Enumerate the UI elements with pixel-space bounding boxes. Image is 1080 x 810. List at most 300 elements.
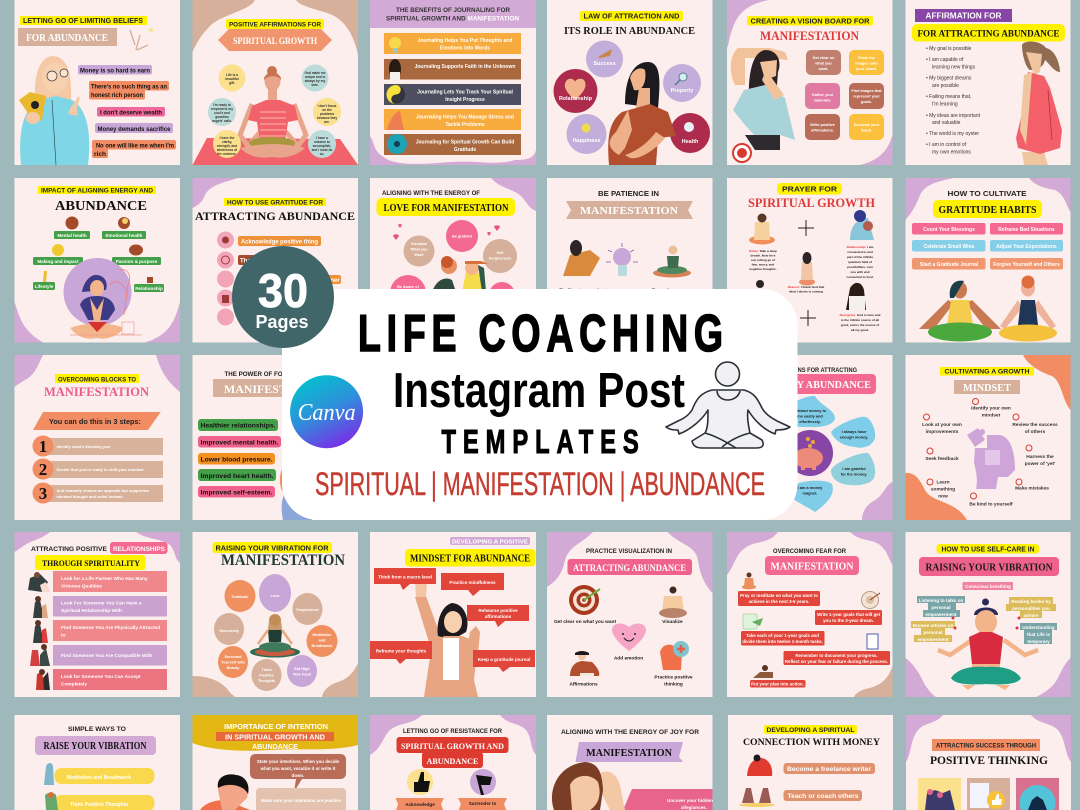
step rows: 1 bbox=[39, 437, 47, 456]
vision board steps: goals. bbox=[861, 100, 872, 104]
heading: affirmations for attracting: MONEY ABUNDANCE bbox=[765, 380, 871, 391]
ribbon: acknowledge: Acknowledge bbox=[405, 802, 435, 807]
visualization labels bbox=[554, 619, 693, 688]
icon: woman holding cards bbox=[19, 28, 153, 165]
heading: mindset for abundance: DEVELOPING A POSITIVE bbox=[452, 540, 528, 546]
mindset labels: something bbox=[931, 486, 955, 492]
benefit pills: Lower blood pressure. bbox=[200, 456, 273, 464]
affirmation bubbles: respond to my bbox=[211, 107, 233, 111]
heading: self-care bbox=[919, 544, 1059, 576]
banner: 3 steps: You can do this in 3 steps: bbox=[49, 417, 141, 426]
blue affirmation blobs: I am a money bbox=[798, 485, 822, 490]
step rows: mindset thought and belief instead bbox=[56, 494, 123, 499]
heading: mindset for abundance: MINDSET FOR ABUNDANCE bbox=[410, 554, 530, 564]
journaling benefit bars: Journaling for Spiritual Growth Can Build bbox=[416, 140, 514, 146]
prayer text blocks: is the infinite source of all bbox=[841, 318, 879, 322]
heading: positive thinking: POSITIVE THINKING bbox=[930, 753, 1048, 767]
vibration blobs: Meditation bbox=[313, 633, 331, 637]
panel: attracting success through positive thinking bbox=[906, 715, 1071, 810]
visualization labels: thinking bbox=[664, 682, 683, 688]
fear steps: you to the 3-year dream. bbox=[823, 618, 874, 623]
intention bubble 1: down. bbox=[292, 773, 304, 778]
visualization labels: Get clear on what you want bbox=[554, 619, 616, 625]
intention bubble 1 bbox=[250, 754, 346, 792]
vision board steps: what you bbox=[814, 62, 832, 66]
heading: joy: MANIFESTATION bbox=[586, 748, 672, 759]
heading: mindset for abundance bbox=[405, 537, 536, 566]
vibration blobs: Beauty bbox=[227, 666, 240, 670]
fear steps: Put your plan into action. bbox=[751, 682, 804, 686]
label: money is so hard to earn: Money is so hard to earn bbox=[80, 68, 150, 74]
gratitude icons and bars bbox=[217, 232, 341, 326]
red speech bubbles bbox=[370, 568, 535, 672]
vision board steps: Get clear on bbox=[813, 56, 834, 60]
caption peeking above cover bbox=[559, 288, 683, 295]
prayer text blocks: what I desire is coming bbox=[788, 290, 823, 294]
heading: intention: ABUNDANCE bbox=[252, 744, 298, 751]
relationship tips: Spiritual Relationship With bbox=[61, 608, 122, 614]
affirmation bubbles bbox=[208, 64, 341, 126]
heading: affirmation for bbox=[915, 9, 1012, 22]
benefit circles bbox=[554, 40, 710, 154]
heading: positive thinking bbox=[930, 739, 1048, 767]
heading: prayer: PRAYER FOR bbox=[782, 184, 838, 194]
self-care labels: personalities you bbox=[1012, 606, 1050, 611]
benefit pills: Improved heart health. bbox=[200, 473, 274, 480]
pill: teach or coach bbox=[784, 790, 862, 801]
vision board steps bbox=[805, 50, 884, 140]
heading: law of attraction: LAW OF ATTRACTION AND bbox=[584, 14, 680, 20]
heading: impact of aligning bbox=[38, 186, 156, 213]
panel: impact of aligning energy bbox=[14, 178, 180, 342]
heading: raise vibration: SIMPLE WAYS TO bbox=[68, 726, 126, 733]
gratitude icons and bars: ner bbox=[330, 278, 340, 284]
love circles: What you bbox=[410, 248, 428, 252]
mindset labels: Harness the bbox=[1026, 455, 1054, 460]
benefit pills: Healthier relationships. bbox=[200, 422, 276, 430]
heading: the power of forgiveness bbox=[213, 371, 333, 397]
blue affirmation blobs: I always have bbox=[842, 429, 866, 434]
heading: limiting beliefs: LETTING GO OF LIMITING BELIEFS bbox=[23, 18, 143, 25]
panel: practice visualization bbox=[547, 532, 712, 697]
label: relationship bbox=[134, 284, 164, 292]
intention bubble 1: what you want, vocalize it or write it bbox=[260, 766, 336, 771]
fear steps: Write 1-year goals that will get bbox=[817, 612, 880, 617]
habit bubbles: Count Your Blessings bbox=[923, 227, 975, 233]
affirmation bubbles: because they bbox=[317, 116, 337, 120]
heading: law of attraction: ITS ROLE IN ABUNDANCE bbox=[564, 25, 695, 37]
vibration blobs: Positive bbox=[259, 674, 274, 678]
gratitude icons and bars: Acknowledge positive thing bbox=[241, 240, 318, 246]
heading: attracting abundance: ATTRACTING ABUNDANCE bbox=[573, 564, 686, 574]
vision board steps: your board. bbox=[856, 67, 877, 71]
journaling benefit bars: Gratitude bbox=[454, 147, 476, 153]
caption peeking above cover: Develop a bbox=[652, 288, 683, 295]
affirmation list: are possible bbox=[932, 83, 959, 89]
heading: positive affirmations bbox=[226, 19, 324, 29]
heading: journaling bbox=[386, 7, 519, 22]
benefit pills bbox=[198, 419, 281, 498]
heading: vision board bbox=[747, 16, 873, 43]
prayer text blocks: out, letting go of bbox=[751, 258, 776, 262]
visualization labels: Practice positive bbox=[654, 676, 693, 680]
heading: the power of forgiveness: MANIFESTATION bbox=[224, 384, 325, 396]
icon: meditating woman in purple circle bbox=[64, 258, 142, 339]
self-care labels: Reading books by bbox=[1011, 599, 1051, 604]
habit bubbles: Adjust Your Expectations bbox=[996, 244, 1057, 250]
heading: affirmations for attracting: AFFIRMATIONS FOR ATTRACTING bbox=[763, 367, 857, 374]
panel: creating a vision board bbox=[727, 0, 892, 165]
benefit circles: Happiness bbox=[573, 138, 600, 144]
journaling benefit bars: Journaling Lets You Track Your Spiritual bbox=[417, 90, 513, 96]
icon: canva logo bbox=[290, 375, 363, 448]
affirmation bubbles: Life is a bbox=[226, 73, 238, 77]
label: money demands sacrifice: Money demands sacrifice bbox=[98, 126, 171, 133]
affirmation list: • Failing means that, bbox=[926, 94, 971, 100]
label: no one will like me bbox=[92, 140, 176, 158]
panel: how to cultivate gratitude habits bbox=[906, 178, 1070, 342]
heading: self-care: HOW TO USE SELF-CARE IN bbox=[942, 546, 1034, 554]
heading: resistance: SPIRITUAL GROWTH AND bbox=[401, 741, 504, 751]
heading: relationships bbox=[31, 542, 168, 570]
icon: writing person bbox=[570, 651, 599, 676]
affirmation list: • My ideas are important bbox=[926, 113, 981, 119]
fear steps: divide them into twelve 1-month tasks. bbox=[742, 639, 823, 644]
vibration blobs: Think bbox=[261, 668, 272, 672]
image tile: glowing silhouette bbox=[1016, 778, 1059, 810]
vibration blobs: Thoughts bbox=[258, 679, 275, 683]
affirmation list: • I am capable of bbox=[926, 57, 964, 63]
vibration blobs: Love bbox=[271, 594, 279, 598]
affirmation list: • I am in control of bbox=[926, 142, 967, 148]
vision board steps: affirmations. bbox=[811, 128, 834, 132]
affirmation bubbles: unique and is bbox=[305, 75, 325, 79]
love circles bbox=[390, 220, 517, 311]
cover panel: white title card bbox=[282, 289, 798, 520]
vision board steps: materials. bbox=[814, 98, 831, 102]
plus signs bbox=[798, 220, 816, 326]
heading: connection with money: DEVELOPING A SPIRITUAL bbox=[766, 727, 855, 734]
heading: positive affirmations: POSITIVE AFFIRMATIONS FOR bbox=[229, 22, 321, 28]
relationship tips: to bbox=[61, 632, 66, 638]
love circles: Visualize bbox=[411, 242, 427, 246]
fear steps: Take each of your 1-year goals and bbox=[746, 633, 819, 638]
journaling benefit bars: Tackle Problems bbox=[445, 122, 485, 128]
label: no such thing as an honest rich person bbox=[89, 81, 169, 100]
icon: meditating woman on mat bbox=[250, 614, 300, 658]
blue affirmation blobs: me easily and bbox=[797, 414, 823, 418]
icon: two meditating women bbox=[919, 276, 1057, 342]
affirmation list: my own emotions bbox=[932, 150, 971, 156]
blue affirmation blobs bbox=[780, 396, 875, 512]
mindset labels: Identify your own bbox=[971, 406, 1011, 412]
heading: vision board: MANIFESTATION bbox=[760, 28, 860, 43]
journaling benefit bars: Journaling Supports Faith in the Unknown bbox=[415, 64, 515, 70]
habit bubbles: Forgive Yourself and Others bbox=[993, 262, 1060, 268]
panel: be patience in manifestation bbox=[547, 178, 712, 342]
heading: affirmation for: AFFIRMATION FOR bbox=[926, 12, 1002, 20]
panel: overcoming fear bbox=[727, 532, 892, 697]
icon: smiling heart bbox=[612, 623, 646, 651]
affirmation list: • The world is my oyster bbox=[926, 131, 979, 137]
relationship tips: Find Someone You Are Physically Attracted bbox=[61, 626, 160, 631]
panel: importance of intention bbox=[192, 715, 358, 810]
panel: aligning with energy of love bbox=[370, 178, 536, 342]
step rows: Identify what's blocking you bbox=[56, 444, 110, 449]
intention bubble 1: State your intentions. When you decide bbox=[257, 759, 339, 764]
prayer text blocks: Reason: I thank God that bbox=[788, 285, 824, 289]
icon: puzzle head bbox=[967, 428, 1015, 489]
panel: prayer for spiritual growth bbox=[727, 178, 892, 342]
prayer text blocks: all my good. bbox=[851, 328, 869, 332]
heading: gratitude: ATTRACTING ABUNDANCE bbox=[195, 209, 355, 223]
heading: resistance: LETTING GO OF RESISTANCE FOR bbox=[403, 728, 502, 735]
mindset labels: Review the success bbox=[1012, 423, 1058, 428]
icon: woman in red jacket bbox=[1016, 42, 1062, 165]
affirmation bubbles: I'm ready to bbox=[213, 103, 231, 107]
heading: growth mindset: MINDSET bbox=[963, 383, 1011, 394]
blue affirmation blobs: I am grateful bbox=[842, 466, 866, 471]
self-care labels: empowerment bbox=[925, 612, 957, 617]
affirmation bubbles: I don't focus bbox=[318, 104, 336, 108]
affirmation list: • My biggest dreams bbox=[926, 76, 972, 82]
fear steps bbox=[738, 591, 890, 688]
heading: intention: IMPORTANCE OF INTENTION bbox=[224, 722, 328, 731]
prayer text blocks: one with and bbox=[851, 270, 870, 274]
affirmation bubbles: side. bbox=[311, 83, 319, 87]
heading: journaling: THE BENEFITS OF JOURNALING FOR bbox=[396, 7, 510, 14]
mindset labels: of others bbox=[1025, 429, 1046, 435]
red speech bubbles: affirmations bbox=[485, 614, 512, 619]
vibration blobs: Eat High bbox=[294, 667, 310, 671]
tagline: SPIRITUAL | MANIFESTATION | ABUNDANCE bbox=[315, 466, 765, 502]
benefit circles: Relationship bbox=[559, 96, 593, 102]
hexagon title: spiritual growth bbox=[218, 29, 332, 51]
step rows: 2 bbox=[39, 460, 47, 479]
prayer figures bbox=[749, 210, 874, 310]
heading: affirmations for attracting bbox=[760, 367, 876, 394]
vibration blobs: Forgiveness bbox=[296, 608, 319, 612]
panel: affirmations for attracting abundance bbox=[727, 355, 892, 520]
icon: woman with raised arm bbox=[731, 48, 795, 162]
heading: gratitude habits: HOW TO CULTIVATE bbox=[948, 189, 1026, 198]
pink text shape: allegiances. bbox=[681, 805, 707, 810]
panel: hidden by cover bbox=[370, 355, 712, 520]
label: no one will like me: No one will like me when I'm bbox=[96, 142, 174, 150]
vibration blobs bbox=[214, 574, 338, 691]
prayer text blocks: Relationship: I am bbox=[847, 245, 873, 249]
label: relationship: Relationship bbox=[135, 286, 163, 291]
mindset labels: improvements bbox=[926, 429, 959, 435]
habit bubbles: Reframe Bad Situations bbox=[998, 227, 1055, 233]
affirmation bubbles lower: I have the bbox=[220, 136, 234, 140]
affirmation bubbles: God made me bbox=[304, 71, 326, 75]
red speech bubbles: Reframe your thoughts bbox=[376, 648, 427, 654]
heading: intention bbox=[216, 722, 334, 751]
heading: raising vibration: RAISING YOUR VIBRATION FOR bbox=[216, 546, 328, 552]
self-care labels: admire bbox=[1023, 613, 1039, 618]
label: I don't deserve wealth bbox=[97, 107, 165, 116]
love circles: Be Aware of bbox=[397, 285, 420, 289]
heading: relationships: ATTRACTING POSITIVE bbox=[31, 546, 107, 553]
self-care labels: that Life is bbox=[1027, 632, 1050, 637]
heading: love for manifestation: LOVE FOR MANIFESTATION bbox=[384, 203, 509, 214]
heading: relationships: RELATIONSHIPS bbox=[113, 546, 166, 553]
love circles: Forgiveness bbox=[489, 256, 511, 260]
heading: prayer bbox=[748, 183, 875, 210]
mindset labels: Look at your own bbox=[922, 423, 962, 428]
prayer text blocks: Recognize: God is here and bbox=[840, 313, 880, 317]
love circles: Be grateful bbox=[452, 234, 472, 238]
mindset labels: Seek feedback bbox=[925, 456, 959, 462]
affirmation list: learning new things bbox=[932, 64, 976, 70]
subheading box: for abundance bbox=[18, 28, 117, 46]
affirmation list: • My goal is possible bbox=[926, 46, 972, 52]
affirmation bubbles: are. bbox=[324, 120, 330, 124]
heading: raise vibration: RAISE YOUR VIBRATION bbox=[44, 741, 147, 752]
journaling benefit bars: Journaling Helps You Put Thoughts and bbox=[418, 38, 512, 44]
caption peeking above cover: Reflect on what bbox=[559, 288, 608, 295]
self-care labels: Understanding bbox=[1022, 625, 1055, 630]
vibration blobs: and bbox=[319, 638, 326, 642]
heading: joy bbox=[561, 729, 699, 762]
impact labels and icons bbox=[33, 216, 161, 290]
ways: yellow pills bbox=[44, 763, 154, 810]
label: no such thing as an honest rich person: There's no such thing as an bbox=[91, 84, 167, 90]
label: I don't deserve wealth: I don't deserve wealth bbox=[100, 110, 162, 116]
ways: yellow pills: Meditation and Breathwork bbox=[67, 775, 131, 781]
prayer text blocks: negative thoughts. bbox=[749, 267, 777, 271]
heading: attracting abundance: PRACTICE VISUALIZATION IN bbox=[586, 548, 672, 555]
vision board steps: Gather your bbox=[812, 93, 833, 97]
affirmation bubbles: angels' calls. bbox=[212, 119, 232, 123]
mindset labels: power of 'yet' bbox=[1025, 461, 1055, 467]
love circles: Self bbox=[497, 251, 503, 255]
self-care labels: personal bbox=[931, 605, 951, 610]
mindset labels bbox=[922, 398, 1058, 508]
subheading box: for abundance: FOR ABUNDANCE bbox=[26, 33, 108, 44]
affirmation bubbles lower: and I must do bbox=[312, 148, 332, 152]
blue affirmation blobs: I attract money to bbox=[794, 408, 826, 413]
relationship tips: Completely bbox=[61, 682, 87, 688]
vision board steps: images onto bbox=[855, 62, 878, 66]
affirmation bubbles lower: mission to bbox=[314, 140, 330, 144]
red speech bubbles: Rehearse positive bbox=[478, 608, 518, 613]
heading: intention: IN SPIRITUAL GROWTH AND bbox=[225, 734, 325, 742]
title: for attracting abundance bbox=[912, 24, 1065, 42]
step rows: Decide that you're ready to shift your mindset bbox=[56, 467, 144, 472]
relationship tips: Virtuous Qualities bbox=[61, 584, 102, 590]
label: money is so hard to earn bbox=[78, 65, 152, 74]
heading: self-care: RAISING YOUR VIBRATION bbox=[926, 562, 1053, 574]
vibration blobs: Generosity bbox=[219, 629, 240, 633]
panel: developing a spiritual connection with money bbox=[728, 715, 893, 810]
icon: thumbs up bbox=[407, 769, 433, 795]
self-care labels: Listening to talks on bbox=[919, 598, 963, 603]
heading: love for manifestation: ALIGNING WITH THE ENERGY OF bbox=[382, 190, 480, 197]
label: money demands sacrifice bbox=[95, 123, 173, 133]
benefit pills: Improved mental health. bbox=[200, 440, 279, 446]
heading: impact of aligning: ABUNDANCE bbox=[55, 198, 147, 213]
fear icons bbox=[742, 572, 880, 678]
step rows bbox=[32, 436, 163, 504]
fear steps: Remember to document your progress. bbox=[795, 653, 878, 658]
panel: aligning with energy of joy bbox=[547, 715, 713, 810]
fear steps: Pray or meditate on what you want to bbox=[740, 593, 818, 598]
panel: developing a positive mindset bbox=[370, 532, 536, 697]
icon: meditating woman with hearts bbox=[938, 598, 1038, 690]
blue affirmation blobs: magnet. bbox=[803, 490, 817, 496]
title: templates: TEMPLATES bbox=[442, 424, 639, 461]
mindset labels: now bbox=[938, 494, 948, 500]
panel: how to use gratitude bbox=[192, 178, 358, 342]
heading: growth mindset: CULTIVATING A GROWTH bbox=[944, 368, 1030, 376]
heading: vision board: CREATING A VISION BOARD FOR bbox=[750, 18, 870, 26]
pill: freelance writer bbox=[784, 763, 875, 774]
affirmation list: and valuable bbox=[932, 120, 961, 126]
panel: overcoming blocks bbox=[14, 355, 180, 520]
vibration blobs: Vibe Food bbox=[293, 672, 312, 676]
self-care labels: Conscious breathing bbox=[965, 584, 1011, 589]
self-care labels bbox=[911, 582, 1057, 644]
heading: resistance bbox=[396, 728, 508, 768]
image tile: thumbs up checklist bbox=[967, 778, 1010, 810]
ribbon: surrender: Surrender to bbox=[469, 801, 496, 806]
pill: freelance writer: Become a freelance writer bbox=[787, 767, 872, 773]
title: life coaching: LIFE COACHING bbox=[358, 304, 723, 362]
panel: raising your vibration bbox=[192, 532, 358, 697]
heading: relationships: THROUGH SPIRITUALITY bbox=[42, 558, 140, 568]
gratitude icons and bars: Thank others bbox=[240, 258, 278, 264]
benefit circles: Success bbox=[593, 61, 616, 67]
journaling benefit bars: Emotions into Words bbox=[440, 46, 490, 52]
blue affirmation blobs: for the money. bbox=[841, 472, 867, 476]
icon: couple bbox=[432, 256, 488, 292]
affirmation bubbles lower: accomplish, bbox=[313, 144, 331, 148]
panel: self-care raising your vibration bbox=[906, 532, 1070, 697]
ribbon: acknowledge bbox=[396, 798, 444, 810]
icon: meditating person bbox=[659, 586, 687, 618]
prayer text blocks: Relax: Take a deep bbox=[749, 249, 777, 253]
heading: joy: ALIGNING WITH THE ENERGY OF JOY FOR bbox=[561, 729, 699, 736]
habit bubbles bbox=[912, 223, 1063, 270]
badge: 30 pages bbox=[232, 246, 334, 348]
relationship tips: Look for a Life Partner Who Has Many bbox=[61, 577, 148, 582]
vision board steps: Find images that bbox=[851, 89, 882, 93]
affirmation bubbles lower: the universe. bbox=[217, 152, 237, 156]
impact labels and icons: Emotional health bbox=[105, 233, 143, 238]
panel: positive affirmations for spiritual growth bbox=[192, 0, 358, 165]
icon: meditating outline figure bbox=[666, 362, 790, 448]
vibration blobs: Breathwork bbox=[312, 644, 333, 648]
heading: love for manifestation bbox=[376, 190, 515, 216]
icon: praying person bbox=[608, 62, 676, 165]
visualization labels: Visualize bbox=[662, 619, 683, 625]
red speech bubbles: Practice mindfulness bbox=[449, 580, 496, 585]
icons: reflection figures bbox=[563, 240, 691, 278]
label: no one will like me: rich bbox=[94, 151, 106, 158]
heading: raising vibration bbox=[212, 542, 345, 569]
affirmation bubbles: on the bbox=[322, 108, 332, 112]
fear steps: achieve in the next 3-5 years. bbox=[749, 599, 809, 604]
habit bubbles: Start a Gratitude Journal bbox=[920, 262, 979, 268]
prayer text blocks: part of the infinite bbox=[847, 255, 873, 259]
heading: be patience: BE PATIENCE IN bbox=[598, 189, 659, 198]
icon: head with plus bbox=[660, 641, 689, 670]
relationship tips: Look For Someone You Can Have a bbox=[61, 602, 142, 606]
benefit pills: Improved self-esteem. bbox=[200, 490, 273, 496]
vision board steps: board. bbox=[861, 128, 872, 132]
